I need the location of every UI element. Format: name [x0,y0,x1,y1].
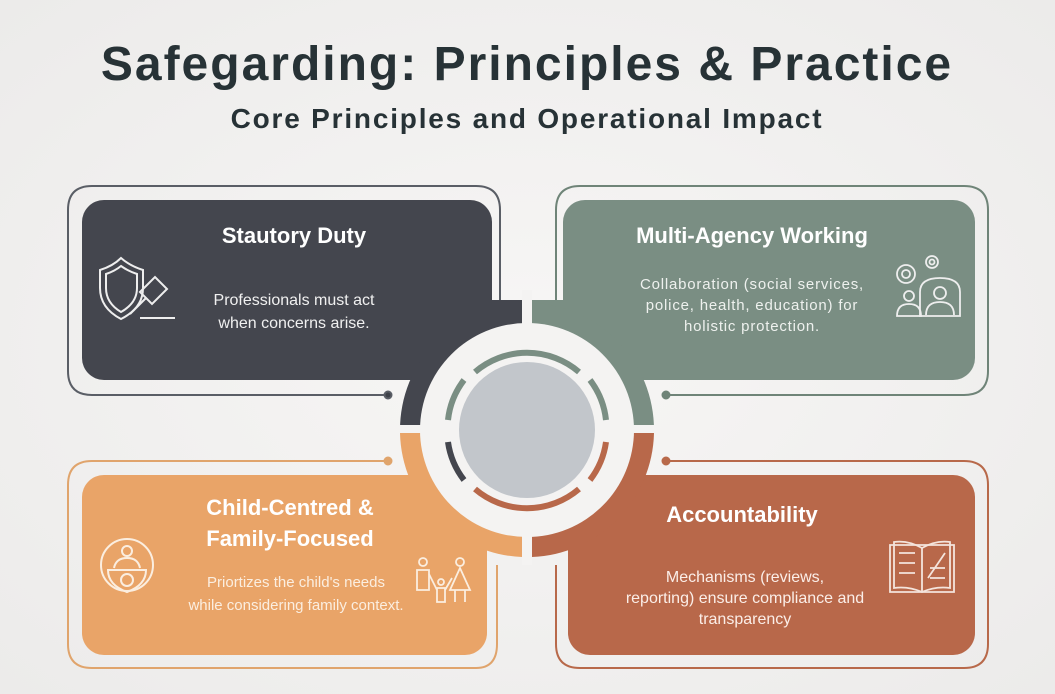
outline: bottom-left [68,458,497,668]
icon: protected child [101,539,153,592]
panel: multi-agency working: Multi-Agency Working [636,223,868,248]
panel: accountability: Accountability [666,502,819,527]
panel: accountability: transparency [699,611,791,628]
panel: multi-agency working: Collaboration (social services, [640,276,864,293]
panel: accountability [532,433,975,655]
dashed ring [448,353,606,508]
icon: family [417,558,470,602]
panel: multi-agency working [532,200,975,430]
outline: top-left [68,186,500,398]
panel: child-centred [82,433,522,655]
title: Safegarding: Principles & Practice [101,38,953,91]
panel: statutory duty: Stautory Duty [222,223,367,248]
panel: statutory duty: Professionals must act [214,292,375,309]
icon: gears and people [897,256,960,316]
icon: open book with checklist [890,542,954,592]
panel: child-centred: Family-Focused [206,526,374,551]
outline: bottom-right [556,458,988,668]
panel: accountability: Mechanisms (reviews, [666,569,824,586]
panel: child-centred: while considering family context. [187,597,404,614]
panel: statutory duty: when concerns arise. [217,315,370,332]
subtitle: Core Principles and Operational Impact [231,103,823,134]
panel: child-centred: Child-Centred & [206,495,374,520]
panel: statutory duty [82,200,522,430]
center hub [395,290,660,565]
panel: multi-agency working: police, health, education) for [646,297,858,314]
panel: accountability: reporting) ensure compliance and [626,590,864,607]
icon: shield and gavel [100,258,175,319]
panel: multi-agency working: holistic protection. [684,318,820,335]
panel: child-centred: Priortizes the child's needs [207,574,385,591]
outline: top-right [556,186,988,398]
